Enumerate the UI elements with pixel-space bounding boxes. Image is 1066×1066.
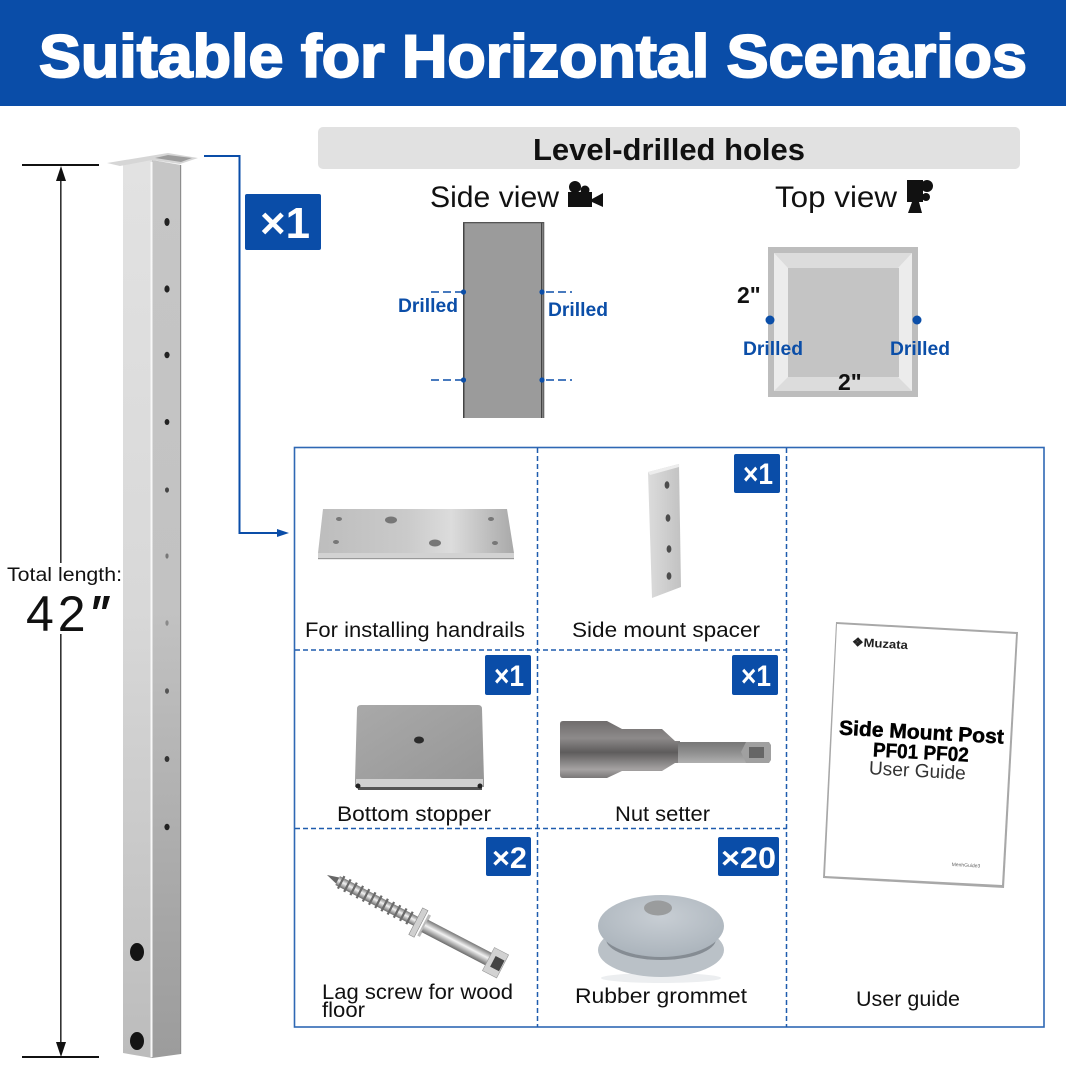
dimension and drilled labels [737, 282, 950, 395]
icon: overhead camera [907, 180, 933, 213]
top view diagram [737, 247, 950, 397]
part caption: User guide [856, 988, 960, 1011]
post holes [130, 218, 170, 1050]
part: user guide booklet [823, 622, 1018, 1011]
part caption: For installing handrails [305, 619, 525, 642]
part caption: Side mount spacer [572, 619, 760, 642]
parts grid frame [294, 448, 1044, 1027]
quantity badge [485, 655, 531, 695]
dimension and drilled labels: 2" [737, 282, 761, 308]
booklet text: MenhGuide3 [951, 862, 981, 870]
part: rubber grommet [575, 837, 779, 1008]
quantity badge: ×2 [492, 842, 527, 875]
booklet text: ❖Muzata [852, 635, 909, 652]
part: handrail plate [305, 509, 525, 642]
length dimension: 42 inches [7, 164, 122, 1058]
section heading: level-drilled holes: Level-drilled holes [533, 132, 805, 167]
header banner [0, 0, 1066, 106]
part caption: Nut setter [615, 803, 710, 826]
top view heading: Top view [775, 181, 897, 214]
part: bottom stopper [337, 655, 531, 826]
booklet text: Side Mount Post [838, 716, 1005, 749]
part caption [322, 981, 513, 1022]
dimension and drilled labels: Drilled [890, 339, 950, 360]
icon: video camera [568, 181, 603, 207]
part caption: floor [322, 999, 365, 1022]
badge: post quantity x1 [245, 194, 321, 250]
part: nut setter [560, 655, 778, 826]
drilled labels: Drilled [398, 296, 458, 317]
quantity badge: ×1 [743, 458, 773, 491]
dimension label: Total length: [7, 565, 122, 586]
quantity badge: ×1 [741, 660, 771, 693]
part caption: Bottom stopper [337, 803, 491, 826]
quantity badge [734, 454, 780, 493]
badge: post quantity x1: ×1 [260, 199, 310, 248]
part caption: Lag screw for wood [322, 981, 513, 1004]
quantity badge [732, 655, 778, 695]
booklet text [832, 635, 1009, 870]
drill markers [431, 292, 572, 380]
title: Suitable for Horizontal Scenarios [39, 23, 1027, 90]
booklet text: User Guide [868, 758, 966, 785]
drilled labels: Drilled [548, 300, 608, 321]
length dimension: 42 inches: 42 [26, 586, 90, 642]
side view heading: Side view [430, 181, 559, 214]
dimension and drilled labels: Drilled [743, 339, 803, 360]
dimension and drilled labels: 2" [838, 369, 862, 395]
drill points [766, 316, 774, 324]
quantity badge: ×1 [494, 660, 524, 693]
section heading: level-drilled holes [318, 127, 1020, 169]
booklet text: PF01 PF02 [872, 739, 969, 767]
part: lag screw [320, 837, 531, 1022]
part: side mount spacer [572, 454, 780, 642]
quantity badge [486, 837, 531, 876]
drilled labels [398, 296, 608, 321]
connector arrow to parts grid [204, 156, 289, 537]
quantity badge: ×20 [721, 842, 776, 875]
post illustration [107, 153, 198, 1058]
part caption: Rubber grommet [575, 985, 747, 1008]
side view diagram [398, 222, 608, 418]
